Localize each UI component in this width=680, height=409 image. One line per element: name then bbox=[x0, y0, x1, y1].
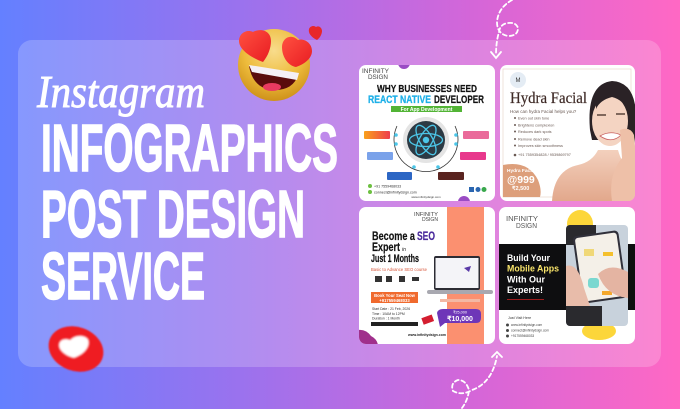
logo: INFINITY bbox=[362, 69, 389, 75]
right heart eye bbox=[282, 37, 312, 67]
translucent panel bbox=[18, 40, 661, 367]
panel: card SEO bbox=[358, 207, 495, 345]
panel: card SEO: Expert bbox=[372, 240, 400, 254]
panel: card React Native: DSIGN bbox=[368, 75, 388, 81]
panel: card React Native: connect@infinitydsign.com bbox=[374, 190, 417, 194]
orange booking box bbox=[371, 292, 418, 303]
heading: Build Your bbox=[507, 253, 550, 263]
heading: Become a bbox=[372, 229, 415, 243]
course details: Time : 10AM to 12PM bbox=[372, 312, 405, 316]
arrow: top dashed loop bbox=[491, 0, 518, 58]
panel: card SEO: Basic to Advance SEO course bbox=[371, 267, 428, 272]
title line: INFOGRAPHICS: INFOGRAPHICS bbox=[41, 111, 338, 186]
panel: card Hydra Facial: Even out skin tone bbox=[518, 116, 549, 120]
icon: red heart bubble bbox=[42, 319, 110, 379]
react hub bbox=[394, 126, 458, 172]
panel: card Mobile Apps: www.infinitydsign.com bbox=[511, 323, 543, 327]
title line: SERVICE: SERVICE bbox=[41, 239, 205, 314]
logo bbox=[510, 72, 526, 88]
logo: INFINITY bbox=[506, 216, 538, 223]
arrow: bottom dashed loop bbox=[452, 352, 502, 408]
course details bbox=[372, 308, 410, 320]
phone photo bbox=[566, 225, 628, 326]
panel: card React Native: www.infinitydsign.com bbox=[411, 195, 441, 199]
price tag bbox=[437, 309, 481, 327]
panel: card Hydra Facial: M bbox=[516, 78, 520, 84]
panel: card Hydra Facial: +91 7559354828 / 9539869797 bbox=[518, 153, 571, 157]
panel: card Hydra Facial bbox=[500, 65, 640, 201]
panel: card React Native: +91 7559468033 bbox=[374, 184, 401, 188]
panel: card Hydra Facial: ₹2,500 bbox=[512, 185, 529, 192]
panel: card Mobile Apps bbox=[499, 207, 635, 344]
panel: card Mobile Apps: Mobile Apps bbox=[507, 264, 559, 274]
panel: card React Native: For App Development bbox=[401, 107, 453, 113]
green tag bbox=[391, 106, 462, 112]
course details: Duration : 1 Month bbox=[372, 316, 400, 320]
price badge bbox=[503, 164, 541, 197]
panel: card Hydra Facial: Hydra Facial bbox=[507, 168, 536, 174]
decorative corner bbox=[358, 330, 378, 345]
black band bbox=[499, 244, 635, 310]
panel: card SEO: ₹25,000 bbox=[453, 310, 467, 314]
panel: card React Native: DEVELOPER bbox=[434, 94, 484, 106]
small heart bbox=[309, 26, 322, 40]
course details: Start Date : 21 Feb, 2026 bbox=[372, 307, 410, 311]
feature chips bbox=[364, 131, 390, 139]
panel: card Mobile Apps: Experts! bbox=[507, 285, 543, 295]
panel: card Hydra Facial: @999 bbox=[507, 174, 535, 186]
portrait bbox=[552, 81, 640, 201]
panel: card SEO: ₹10,000 bbox=[447, 315, 473, 323]
left heart eye bbox=[239, 30, 271, 62]
panel: card SEO: +917559468033 bbox=[379, 298, 410, 303]
contact: Just Visit Here bbox=[508, 316, 531, 320]
panel: card Mobile Apps: With Our bbox=[507, 274, 545, 284]
panel: card Mobile Apps: connect@infinitydsign.com bbox=[511, 328, 549, 332]
panel: card SEO: Just 1 Months bbox=[371, 253, 419, 265]
panel: card SEO: Book Your Seat Now bbox=[374, 293, 416, 298]
panel: card SEO: SEO bbox=[417, 229, 435, 243]
panel: card SEO: DSIGN bbox=[422, 217, 438, 223]
panel: card SEO: in bbox=[402, 247, 406, 253]
panel: card Mobile Apps: DSIGN bbox=[516, 223, 537, 230]
heading: Hydra Facial bbox=[510, 90, 588, 107]
panel: card Hydra Facial: Brightens complexion bbox=[518, 124, 554, 128]
panel: card Hydra Facial: Reduces dark spots bbox=[518, 130, 552, 134]
website: www.infinitydsign.com bbox=[407, 333, 446, 337]
panel: card Hydra Facial: Remove dead skin bbox=[518, 138, 549, 142]
panel: card Mobile Apps: +917559468033 bbox=[511, 334, 534, 338]
title bbox=[36, 66, 338, 314]
yellow blobs bbox=[567, 210, 593, 226]
title script line: Instagram: Instagram bbox=[36, 66, 205, 117]
contact bbox=[368, 184, 372, 188]
panel: card React Native: REACT NATIVE bbox=[368, 94, 431, 106]
title line: POST DESIGN: POST DESIGN bbox=[41, 177, 305, 252]
panel: card React Native bbox=[359, 57, 495, 208]
laptop bbox=[434, 256, 480, 290]
panel: card Hydra Facial: Improves skin smoothness bbox=[518, 144, 563, 148]
bullet list: How can hydra Facial helps you? bbox=[510, 109, 577, 114]
logo: INFINITY bbox=[414, 212, 438, 218]
icon: heart eyes emoji bbox=[238, 26, 322, 101]
feature icons bbox=[375, 276, 419, 282]
heading: WHY BUSINESSES NEED bbox=[377, 83, 477, 95]
